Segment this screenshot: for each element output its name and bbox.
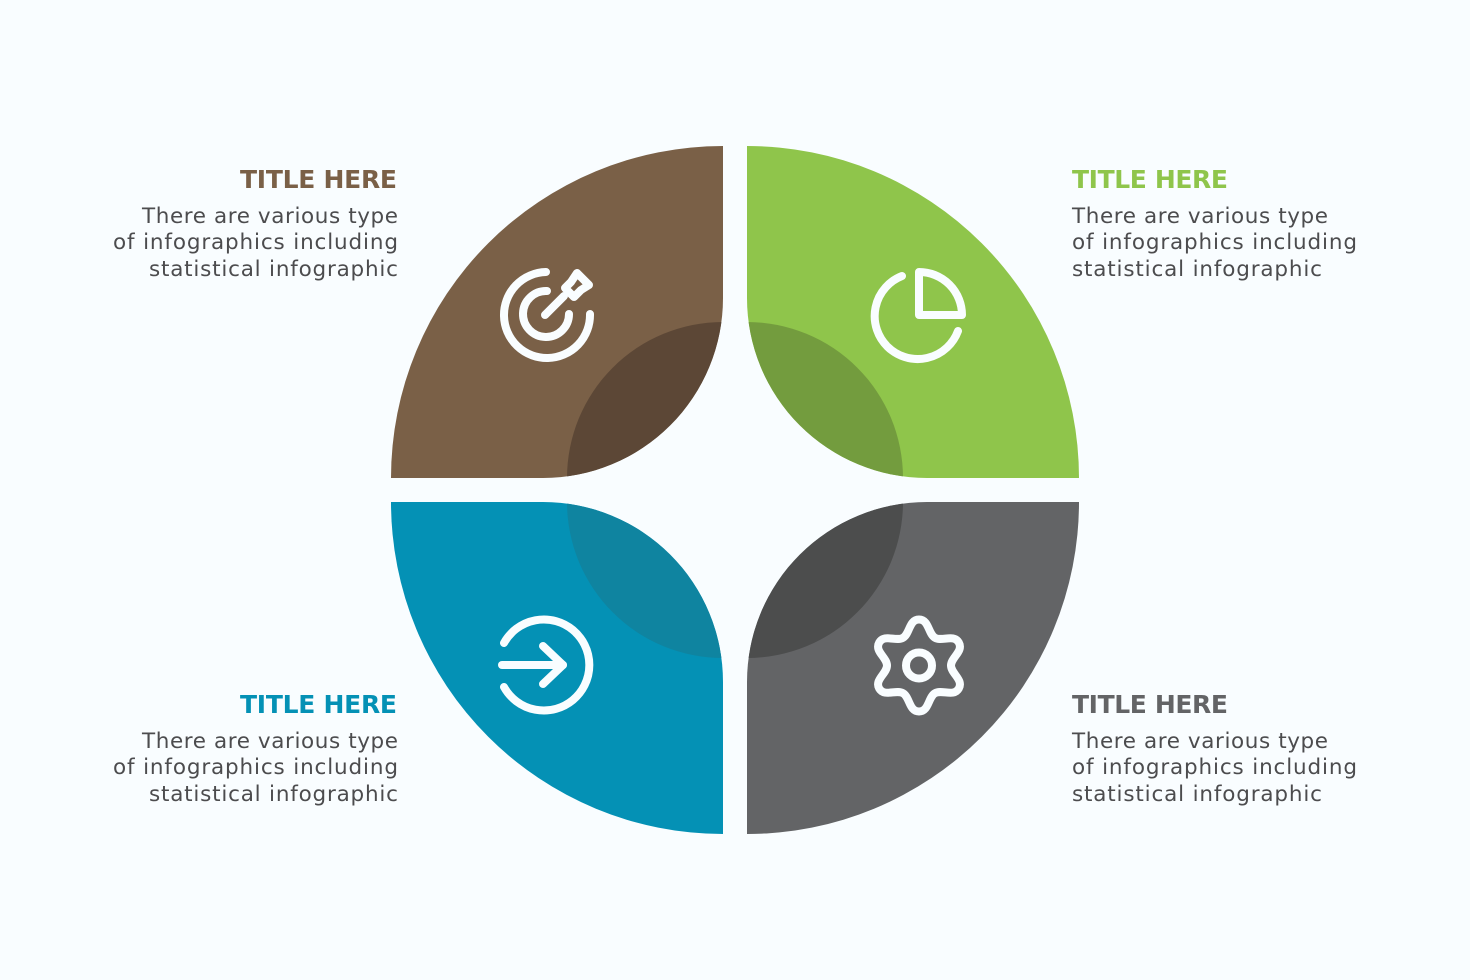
- icon: target with dart: [504, 272, 590, 358]
- text block: top left: [113, 165, 398, 282]
- text block: top left: There are various type: [141, 204, 398, 229]
- panel: green quadrant: [747, 146, 1079, 478]
- text block: bottom left: TITLE HERE: [240, 690, 397, 719]
- text block: bottom right: There are various type: [1071, 729, 1328, 754]
- panel: blue quadrant: [391, 502, 723, 834]
- text block: top left: statistical infographic: [149, 257, 398, 282]
- icon: pie chart: [875, 272, 962, 359]
- text block: bottom left: [113, 690, 398, 807]
- text block: bottom left: statistical infographic: [149, 782, 398, 807]
- text block: bottom right: [1071, 690, 1357, 807]
- icon: arrow in circle: [502, 620, 589, 710]
- panel: gray quadrant: [747, 502, 1079, 834]
- text block: bottom right: of infographics including: [1072, 755, 1357, 780]
- text block: bottom left: There are various type: [141, 729, 398, 754]
- text block: top right: [1071, 165, 1357, 282]
- text block: bottom left: of infographics including: [113, 755, 398, 780]
- text block: top left: TITLE HERE: [240, 165, 397, 194]
- text block: top left: of infographics including: [113, 230, 398, 255]
- icon: gear: [878, 620, 960, 712]
- text block: top right: TITLE HERE: [1072, 165, 1228, 194]
- panel: brown quadrant: [391, 146, 723, 478]
- text block: top right: There are various type: [1071, 204, 1328, 229]
- text block: top right: statistical infographic: [1072, 257, 1322, 282]
- text block: bottom right: TITLE HERE: [1072, 690, 1228, 719]
- text block: top right: of infographics including: [1072, 230, 1357, 255]
- text block: bottom right: statistical infographic: [1072, 782, 1322, 807]
